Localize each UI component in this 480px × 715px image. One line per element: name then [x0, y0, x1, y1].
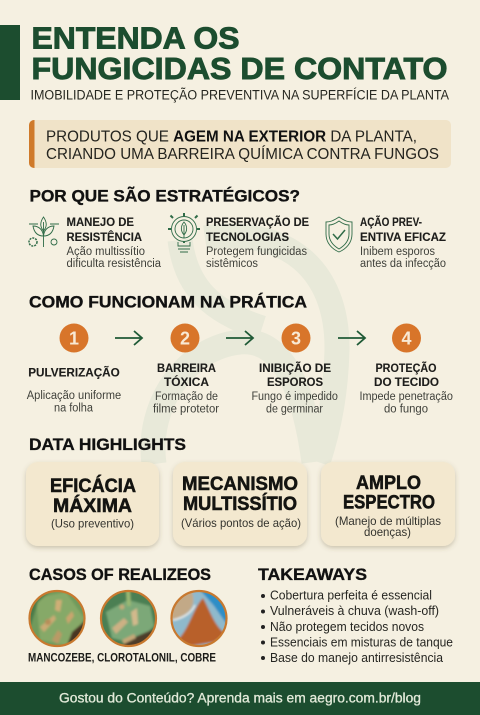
- heading: takeaways: TAKEAWAYS: [258, 565, 367, 584]
- item: ação preventiva eficaz: AÇÃO PREV-: [360, 214, 422, 229]
- background watermark: leaf shape: [153, 236, 337, 464]
- step 3: inibição de esporos: [251, 324, 338, 416]
- step 3: inibição de esporos: Fungo é impedido: [251, 391, 338, 403]
- list: takeaways: Não protegem tecidos novos: [270, 620, 424, 634]
- heading: como funcionam na prática: COMO FUNCIONAM NA PRÁTICA: [29, 293, 307, 312]
- step 2: barreira tóxica: filme protetor: [153, 404, 219, 416]
- title: FUNGICIDAS DE CONTATO: [32, 52, 448, 86]
- item: preservação de tecnologias: PRESERVAÇÃO DE: [206, 214, 309, 229]
- callout: definition: CRIANDO UMA BARREIRA QUÍMICA CONTRA FUNGOS: [46, 144, 439, 163]
- card: eficácia máxima: [26, 462, 159, 546]
- step 4: proteção do tecido: PROTEÇÃO: [376, 360, 436, 375]
- heading: casos: CASOS OF REALIZEOS: [29, 565, 211, 584]
- item: preservação de tecnologias: [168, 213, 309, 270]
- callout: definition: PRODUTOS QUE AGEM NA EXTERIOR DA PLANTA,: [46, 128, 417, 146]
- item: manejo de resistência: [29, 215, 162, 270]
- step 1: pulverização: na folha: [54, 403, 94, 415]
- step 3: inibição de esporos: ESPOROS: [267, 375, 323, 389]
- item: ação preventiva eficaz: Inibem esporos: [360, 246, 435, 258]
- step 4: proteção do tecido: Impede penetração: [359, 391, 453, 403]
- list: takeaways: Cobertura perfeita é essencial: [270, 589, 432, 603]
- step 1: pulverização: 1: [69, 328, 79, 348]
- caption: product names: MANCOZEBE, CLOROTALONIL, COBRE: [28, 653, 216, 665]
- icon: gear light bulb with leaf: [168, 213, 200, 252]
- card: amplo espectro: ESPECTRO: [343, 492, 435, 514]
- step 4: proteção do tecido: do fungo: [384, 404, 428, 416]
- item: preservação de tecnologias: Protegem fungicidas: [206, 246, 307, 258]
- header accent bar: [0, 25, 20, 100]
- card: mecanismo multissítio: [173, 462, 307, 546]
- title: ENTENDA OS: [32, 22, 240, 56]
- card: eficácia máxima: EFICÁCIA: [50, 474, 136, 497]
- footer: [0, 682, 480, 715]
- icon: plant with spores: [29, 217, 59, 247]
- footer: Gostou do Conteúdo? Aprenda mais em aegro.com.br/blog: [59, 691, 421, 706]
- card: mecanismo multissítio: MECANISMO: [182, 473, 298, 495]
- card: eficácia máxima: (Uso preventivo): [51, 517, 134, 531]
- title: [32, 22, 448, 86]
- item: ação preventiva eficaz: [326, 214, 446, 270]
- item: ação preventiva eficaz: antes da infecção: [360, 258, 446, 270]
- item: manejo de resistência: dificulta resistência: [66, 258, 162, 270]
- step 2: barreira tóxica: Formação de: [155, 391, 218, 403]
- item: ação preventiva eficaz: ENTIVA EFICAZ: [360, 230, 446, 244]
- list: takeaways: Essenciais em misturas de tanque: [270, 636, 453, 650]
- item: preservação de tecnologias: TECNOLOGIAS: [206, 230, 289, 244]
- item: manejo de resistência: RESISTÊNCIA: [66, 229, 142, 244]
- card: amplo espectro: [321, 462, 455, 546]
- card: amplo espectro: AMPLO: [356, 472, 421, 494]
- card: amplo espectro: (Manejo de múltiplas: [335, 514, 441, 528]
- heading: por que são estratégicos: POR QUE SÃO ESTRATÉGICOS?: [30, 186, 300, 206]
- step 3: inibição de esporos: de germinar: [266, 404, 323, 416]
- step 2: barreira tóxica: 2: [180, 328, 190, 348]
- photo: copper powder: [171, 590, 228, 647]
- item: manejo de resistência: MANEJO DE: [66, 215, 134, 229]
- card: mecanismo multissítio: (Vários pontos de ação): [181, 516, 301, 530]
- step 4: proteção do tecido: [359, 324, 453, 416]
- step 1: pulverização: PULVERIZAÇÃO: [28, 365, 120, 380]
- step 3: inibição de esporos: 3: [291, 328, 301, 348]
- callout: definition: [29, 120, 451, 168]
- list: takeaways: Base do manejo antirresistência: [270, 651, 443, 665]
- card: amplo espectro: doenças): [364, 525, 411, 539]
- heading: data highlights: DATA HIGHLIGHTS: [29, 435, 186, 454]
- arrow: [226, 331, 253, 345]
- arrow: [338, 331, 365, 345]
- step 1: pulverização: Aplicação uniforme: [27, 390, 121, 402]
- icon: shield with check: [326, 217, 352, 252]
- step 2: barreira tóxica: TÓXICA: [164, 374, 209, 389]
- card: eficácia máxima: MÁXIMA: [53, 494, 132, 517]
- step 2: barreira tóxica: BARREIRA: [157, 361, 216, 375]
- photo: leaf with lesions 2: [100, 590, 157, 648]
- step 4: proteção do tecido: DO TECIDO: [374, 375, 439, 389]
- step 3: inibição de esporos: INIBIÇÃO DE: [259, 360, 331, 375]
- photo: leaf with lesions 1: [29, 590, 86, 648]
- arrow: [115, 331, 142, 345]
- list: takeaways: Vulneráveis à chuva (wash-off): [270, 604, 439, 618]
- step 2: barreira tóxica: [153, 324, 219, 416]
- step 1: pulverização: [27, 324, 121, 415]
- item: manejo de resistência: Ação multissítio: [66, 246, 145, 258]
- list: takeaways: [261, 589, 453, 665]
- card: mecanismo multissítio: MULTISSÍTIO: [183, 492, 297, 515]
- item: preservação de tecnologias: sistêmicos: [206, 258, 258, 270]
- step 4: proteção do tecido: 4: [401, 328, 412, 348]
- subtitle: IMOBILIDADE E PROTEÇÃO PREVENTIVA NA SUPERFÍCIE DA PLANTA: [30, 88, 449, 102]
